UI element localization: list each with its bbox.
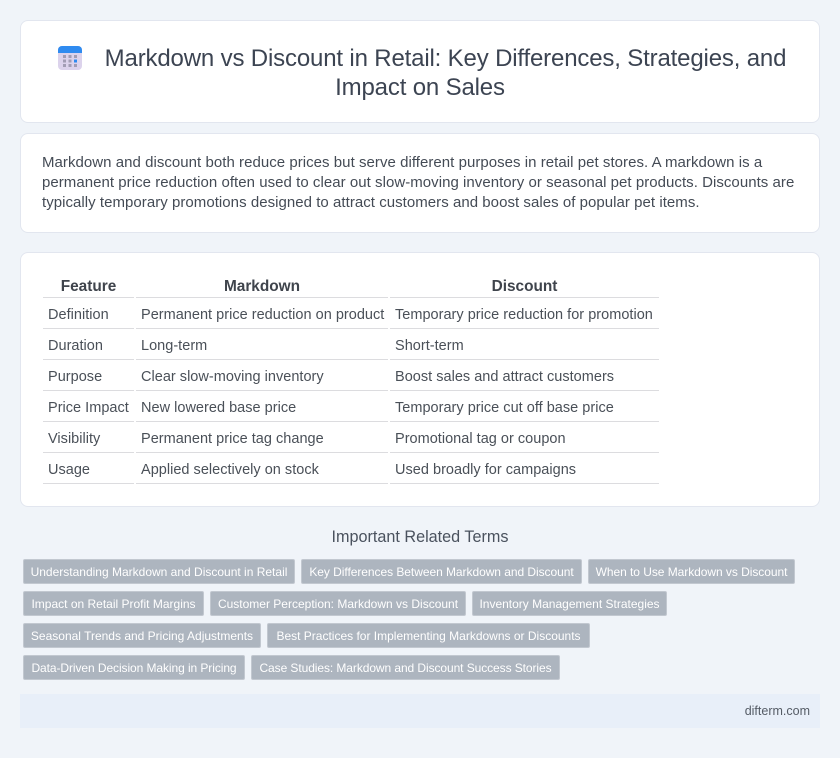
footer: site name: difterm.com [745,704,810,718]
heading: important related terms: Important Related Terms [332,528,508,546]
title: Markdown vs Discount in Retail: Key Differences, Strategies, and [105,45,786,72]
comparison table: Permanent price tag change [141,431,324,447]
related term tags [23,559,795,680]
comparison table: Definition [48,307,109,323]
related term tags: Case Studies: Markdown and Discount Success Stories [259,661,552,675]
related term tags: Customer Perception: Markdown vs Discount [218,597,458,611]
comparison table: Permanent price reduction on product [141,307,384,323]
comparison table: Markdown [224,278,300,295]
comparison table: Promotional tag or coupon [395,431,566,447]
related term tags: Impact on Retail Profit Margins [31,597,196,611]
related term tags: When to Use Markdown vs Discount [596,565,787,579]
related term tags: Inventory Management Strategies [479,597,660,611]
comparison table: Feature [61,278,116,295]
comparison table [43,278,659,484]
related term tags: Data-Driven Decision Making in Pricing [31,661,237,675]
introduction text [42,154,794,211]
panel: comparison table [20,252,820,507]
related term tags: Understanding Markdown and Discount in Retail [31,565,287,579]
panel: introduction [20,133,820,233]
comparison table: Applied selectively on stock [141,462,319,478]
comparison table: Purpose [48,369,102,385]
icon: calendar [58,46,82,70]
comparison table: Price Impact [48,400,129,416]
panel: title card [20,20,820,123]
footer bar [20,694,820,728]
introduction text: permanent price reduction often used to clear out slow-moving inventory or seasonal pet products. Discounts are [42,174,794,191]
comparison table: Short-term [395,338,464,354]
introduction text: Markdown and discount both reduce prices but serve different purposes in retail pet stores. A markdown is a [42,154,762,171]
comparison table: Used broadly for campaigns [395,462,576,478]
related term tags: Best Practices for Implementing Markdowns or Discounts [276,629,581,643]
comparison table: Duration [48,338,103,354]
related term tags: Seasonal Trends and Pricing Adjustments [31,629,253,643]
comparison table: New lowered base price [141,400,296,416]
comparison table: Visibility [48,431,100,447]
title: Impact on Sales [335,74,505,101]
introduction text: typically temporary promotions designed to attract customers and boost sales of popular pet items. [42,194,700,211]
comparison table: Long-term [141,338,207,354]
comparison table: Clear slow-moving inventory [141,369,324,385]
title [105,45,786,101]
comparison table: Temporary price cut off base price [395,400,614,416]
comparison table: Temporary price reduction for promotion [395,307,653,323]
comparison table: Boost sales and attract customers [395,369,614,385]
related term tags: Key Differences Between Markdown and Discount [309,565,574,579]
comparison table: Usage [48,462,90,478]
comparison table: Discount [492,278,557,295]
